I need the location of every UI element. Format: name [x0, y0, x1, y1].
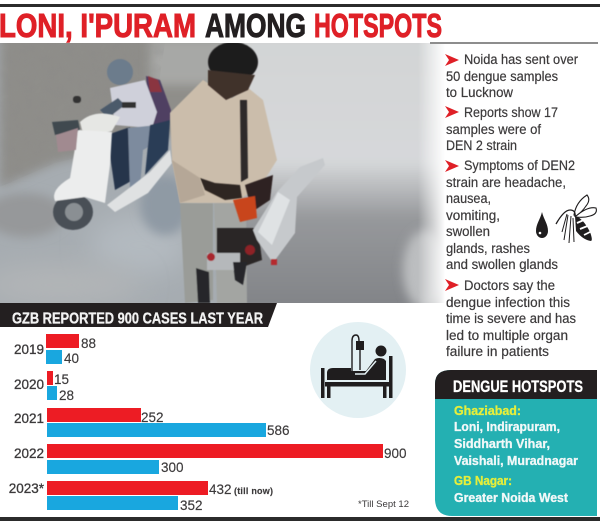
title	[0, 7, 442, 44]
value labels: 352	[180, 498, 203, 513]
year labels: 2023*	[9, 481, 45, 496]
title: LONI, I'PURAM	[0, 7, 196, 44]
title: AMONG	[205, 7, 306, 44]
wall	[0, 33, 235, 187]
bullet: symptoms: glands, rashes	[446, 241, 530, 256]
riders	[100, 59, 171, 190]
bottom rule	[0, 517, 600, 521]
bullet: samples sent: Noida has sent over	[464, 52, 578, 67]
bullet: DEN 2 reports: DEN 2 strain	[446, 138, 517, 153]
right panel rule	[430, 42, 598, 44]
year labels	[9, 342, 45, 496]
year labels: 2020	[14, 377, 44, 392]
value labels: 252	[141, 410, 164, 425]
panel: dengue hotspots: Siddharth Vihar,	[454, 437, 550, 451]
panel: dengue hotspots	[435, 370, 597, 516]
value labels	[54, 336, 409, 513]
bullet: DEN 2 reports: Reports show 17	[464, 105, 558, 120]
bullet: symptoms: vomiting,	[446, 208, 500, 223]
panel: dengue hotspots: GB Nagar:	[454, 474, 512, 488]
value labels: 28	[59, 388, 74, 403]
bullet: doctors: failure in patients	[446, 344, 549, 359]
icon: blood drop	[536, 212, 548, 238]
panel: dengue hotspots: Ghaziabad:	[454, 404, 521, 418]
value labels: 900	[384, 446, 407, 461]
bar chart	[9, 334, 409, 513]
panel: dengue hotspots: Greater Noida West	[454, 491, 569, 505]
year labels: 2021	[14, 411, 44, 426]
panel: dengue hotspots: Vaishali, Muradnagar	[454, 454, 578, 468]
icon: mosquito	[556, 195, 596, 243]
bullet: symptoms	[445, 158, 575, 272]
man head	[207, 43, 259, 76]
bars	[46, 334, 79, 348]
value labels: 15	[54, 372, 69, 387]
chart header: GZB REPORTED 900 CASES LAST YEAR	[12, 310, 263, 328]
bullet: symptoms: swollen	[446, 224, 490, 239]
bullet: symptoms: Symptoms of DEN2	[464, 158, 575, 173]
photo: man fogging street beside scooter	[0, 33, 455, 313]
bullet: doctors: dengue infection this	[446, 295, 570, 310]
bullet list	[445, 52, 578, 359]
value labels: 586	[267, 423, 290, 438]
lower smoke	[0, 193, 65, 237]
fogging machine	[207, 158, 325, 285]
icon: hospital bed in circle	[310, 322, 406, 418]
value labels: (till now)	[234, 486, 273, 496]
bullet: DEN 2 reports	[445, 105, 558, 153]
photo right fade	[418, 43, 445, 303]
year labels: 2022	[14, 446, 44, 461]
top rule	[0, 4, 600, 7]
bullet: symptoms: strain are headache,	[446, 175, 566, 190]
panel: dengue hotspots: Loni, Indirapuram,	[454, 420, 560, 434]
chart header	[0, 303, 277, 328]
bullet: symptoms: and swollen glands	[446, 257, 558, 272]
man trousers	[180, 200, 247, 303]
right smoke and road	[236, 43, 440, 303]
bullet: samples sent: to Lucknow	[446, 85, 513, 100]
value labels: *Till Sept 12	[358, 499, 409, 510]
bullet: DEN 2 reports: samples were of	[446, 122, 541, 137]
bullet: samples sent: 50 dengue samples	[446, 69, 558, 84]
bullet: doctors: time is severe and has	[446, 311, 576, 326]
bullet: samples sent	[445, 52, 578, 100]
bullet: doctors: Doctors say the	[464, 278, 555, 293]
value labels: 432	[209, 482, 232, 497]
year labels: 2019	[14, 342, 44, 357]
bullet: doctors	[445, 278, 576, 359]
value labels: 40	[64, 351, 79, 366]
scooter	[52, 96, 172, 230]
value labels: 88	[81, 336, 96, 351]
man shirt	[170, 80, 277, 203]
value labels: 300	[161, 460, 184, 475]
bullet: doctors: led to multiple organ	[446, 328, 568, 343]
title: HOTSPOTS	[314, 7, 442, 44]
bullet: symptoms: nausea,	[446, 191, 491, 206]
